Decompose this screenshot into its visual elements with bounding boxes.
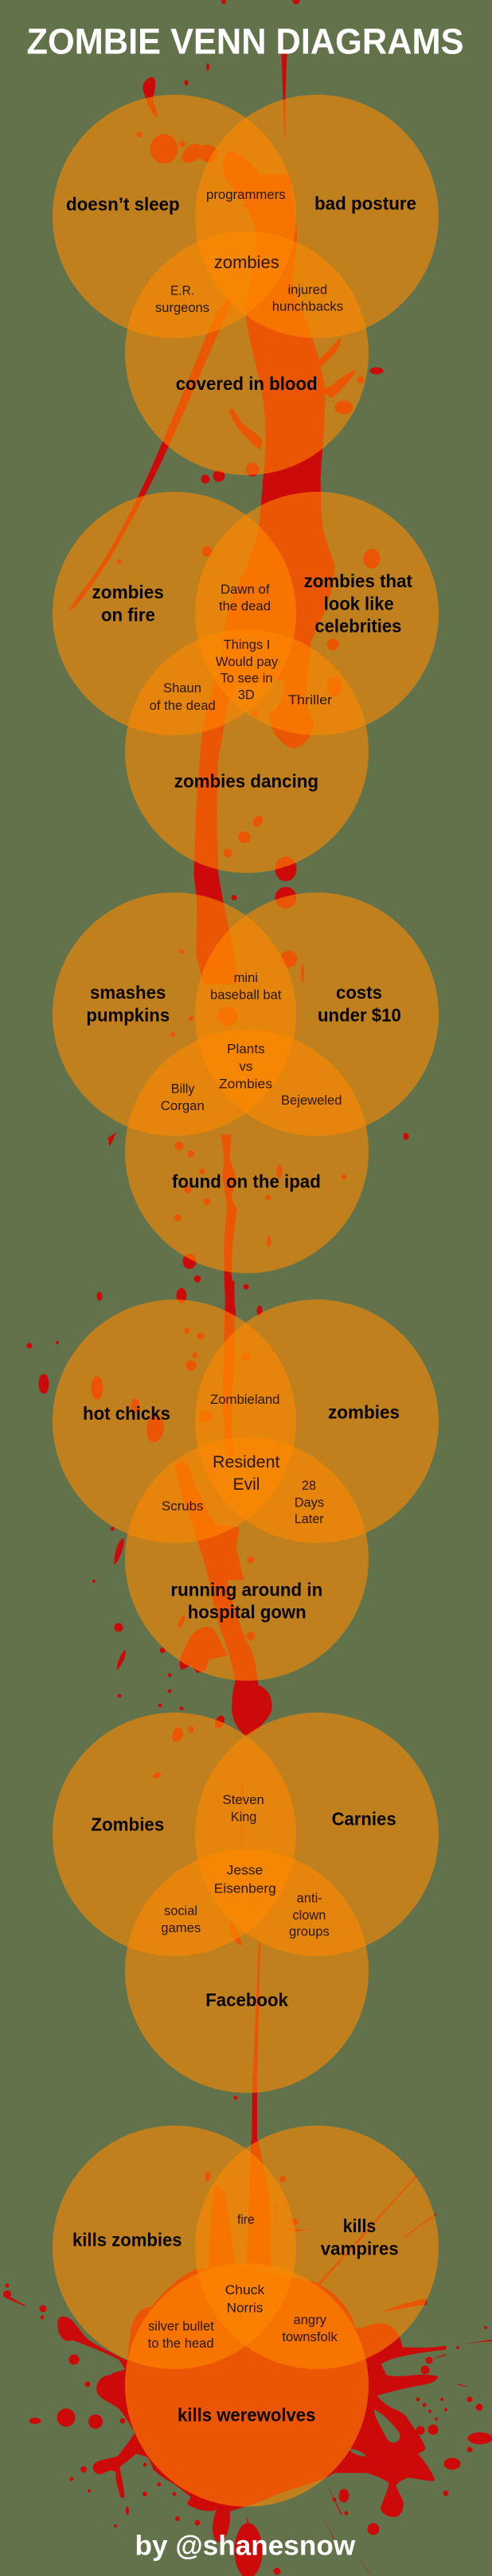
blood: drops around second diagram [118, 547, 380, 982]
blood: flow and blob between fourth and fifth diagrams [118, 1461, 271, 1736]
label: running around in hospital gown: hospital gown [188, 1602, 307, 1623]
label: kills zombies: kills zombies [72, 2230, 182, 2251]
blood: large splat [58, 2266, 446, 2516]
label: kills vampires [321, 2216, 399, 2258]
label: Plants vs Zombies: vs [239, 1059, 252, 1074]
circles: zombies on fire, zombies that look like celebrities, zombies dancing [53, 492, 439, 873]
label: costs under $10: costs [336, 982, 382, 1003]
label: Steven King: Steven [223, 1792, 264, 1807]
label: Steven King: King [231, 1809, 256, 1824]
label: Jesse Eisenberg: Jesse [227, 1863, 263, 1878]
blood: splat droplets [3, 2284, 492, 2576]
label: Plants vs Zombies: Plants [227, 1041, 265, 1056]
label: E.R. surgeons [155, 283, 209, 315]
label: social games: games [161, 1920, 201, 1935]
label: Resident Evil: Resident [213, 1452, 279, 1471]
label: zombies dancing: zombies dancing [174, 770, 318, 791]
venn diagram 4: Resident Evil [53, 1300, 439, 1681]
label: 28 Days Later [295, 1478, 324, 1526]
blood: trunk side splashes [201, 337, 383, 483]
label: E.R. surgeons: surgeons [155, 300, 209, 315]
label: Bejeweled: Bejeweled [281, 1093, 342, 1108]
blood: upper streaks in sixth diagram [205, 2141, 437, 2313]
label: fire: fire [237, 2212, 255, 2227]
label: injured hunchbacks [272, 282, 343, 314]
venn diagram 2: Things I would pay to see in 3D [53, 492, 439, 873]
label: Resident Evil: Evil [232, 1475, 260, 1494]
label: silver bullet to the head: silver bullet [148, 2318, 214, 2333]
label: Plants vs Zombies [219, 1041, 272, 1091]
label: doesn't sleep: doesn’t sleep [66, 194, 180, 215]
venn diagram 1: zombies [53, 95, 439, 475]
label: Things I Would pay To see in 3D: Things I [224, 637, 270, 652]
label: mini baseball bat: mini [234, 970, 258, 985]
label: Dawn of the dead: Dawn of [221, 582, 270, 597]
label: hot chicks: hot chicks [83, 1403, 170, 1424]
label: Things I Would pay To see in 3D: 3D [238, 688, 255, 703]
label: angry townsfolk [282, 2312, 338, 2344]
circles: doesn't sleep, bad posture, covered in blood [53, 95, 439, 475]
label: zombies: zombies [328, 1402, 400, 1423]
label: zombies on fire [92, 582, 164, 625]
label: 28 Days Later: Days [295, 1495, 324, 1510]
label: Zombies: Zombies [91, 1814, 164, 1835]
label: angry townsfolk: angry [293, 2312, 326, 2327]
venn diagram 5: Jesse Eisenberg [53, 1713, 439, 2093]
label: silver bullet to the head [148, 2318, 214, 2351]
label: Billy Corgan [161, 1081, 205, 1113]
label: Carnies: Carnies [332, 1808, 396, 1829]
label: costs under $10: under $10 [318, 1004, 401, 1025]
label: kills vampires: vampires [321, 2238, 399, 2258]
label: kills werewolves: kills werewolves [178, 2405, 315, 2426]
circles: Zombies, Carnies, Facebook [53, 1713, 439, 2093]
label: zombies on fire: zombies [92, 582, 164, 602]
label: smashes pumpkins: pumpkins [86, 1004, 170, 1025]
label: zombies that look like celebrities: celebrities [314, 616, 401, 637]
circles: kills zombies, kills vampires, kills werewolves [53, 2126, 439, 2507]
label: Resident Evil [213, 1452, 279, 1494]
label: kills vampires: kills [343, 2216, 376, 2236]
label: anti-clown groups: anti- [296, 1891, 322, 1905]
label: Scrubs: Scrubs [162, 1498, 203, 1514]
label: 28 Days Later: Later [295, 1511, 324, 1526]
label: Facebook: Facebook [205, 1989, 288, 2010]
credit: by @shanesnow: by @shanesnow [135, 2531, 356, 2562]
label: Things I Would pay To see in 3D [216, 637, 279, 703]
blood: top drops and streak [137, 0, 299, 163]
label: angry townsfolk: townsfolk [282, 2329, 338, 2344]
label: injured hunchbacks: hunchbacks [272, 299, 343, 314]
venn diagram 3: Plants vs Zombies [53, 893, 439, 1273]
blood: drops around fourth diagram [27, 1276, 262, 1677]
label: Dawn of the dead: the dead [219, 598, 271, 614]
blood: drops and thin line at fifth diagram [152, 1715, 260, 2149]
label: Shaun of the dead: Shaun [163, 680, 201, 696]
label: Plants vs Zombies: Zombies [219, 1076, 272, 1091]
label: zombies that look like celebrities [304, 571, 412, 637]
venn diagram 6: Chuck Norris [53, 2126, 439, 2507]
label: injured hunchbacks: injured [288, 282, 327, 297]
label: found on the ipad: found on the ipad [172, 1171, 321, 1191]
label: Steven King [223, 1792, 264, 1824]
label: Shaun of the dead [150, 680, 216, 713]
label: Chuck Norris: Norris [227, 2300, 263, 2315]
label: anti-clown groups: clown [292, 1908, 326, 1923]
label: zombies: zombies [214, 252, 279, 272]
label: covered in blood: covered in blood [176, 373, 318, 394]
label: anti-clown groups [289, 1891, 330, 1939]
label: running around in hospital gown: running around in [170, 1579, 322, 1600]
label: Thriller: Thriller [288, 692, 333, 707]
label: anti-clown groups: groups [289, 1924, 330, 1939]
label: Jesse Eisenberg: Eisenberg [214, 1881, 276, 1896]
label: bad posture: bad posture [314, 193, 416, 214]
label: running around in hospital gown [170, 1579, 322, 1623]
label: Jesse Eisenberg [214, 1863, 276, 1896]
label: social games: social [164, 1903, 197, 1918]
label: 28 Days Later: 28 [302, 1478, 316, 1493]
label: zombies that look like celebrities: zombies that [304, 571, 412, 591]
blood: diagonal thin streak [69, 298, 232, 610]
label: Things I Would pay To see in 3D: To see in [221, 671, 272, 686]
label: mini baseball bat [210, 970, 282, 1003]
label: Billy Corgan: Corgan [161, 1098, 205, 1113]
blood: main trunk flow [194, 151, 334, 984]
label: mini baseball bat: baseball bat [210, 988, 282, 1003]
label: Chuck Norris: Chuck [225, 2282, 265, 2297]
label: silver bullet to the head: to the head [148, 2336, 214, 2351]
label: Things I Would pay To see in 3D: Would pay [216, 654, 279, 669]
label: smashes pumpkins [86, 982, 170, 1025]
label: social games [161, 1903, 201, 1935]
circles: smashes pumpkins, costs under $10, found on the ipad [53, 893, 439, 1273]
label: zombies on fire: on fire [101, 604, 155, 625]
label: Shaun of the dead: of the dead [150, 698, 216, 713]
label: programmers: programmers [206, 187, 286, 202]
label: Chuck Norris [225, 2282, 265, 2315]
title: ZOMBIE VENN DIAGRAMS [27, 21, 463, 61]
label: smashes pumpkins: smashes [90, 982, 166, 1003]
blood: lower drip through third diagram [108, 950, 408, 1315]
label: E.R. surgeons: E.R. [170, 283, 194, 298]
label: Dawn of the dead [219, 582, 271, 614]
label: Billy Corgan: Billy [171, 1081, 195, 1096]
label: zombies that look like celebrities: look like [324, 593, 394, 614]
label: Zombieland: Zombieland [210, 1392, 280, 1407]
circles: hot chicks, zombies, running around in hospital gown [53, 1300, 439, 1681]
label: costs under $10 [318, 982, 401, 1025]
